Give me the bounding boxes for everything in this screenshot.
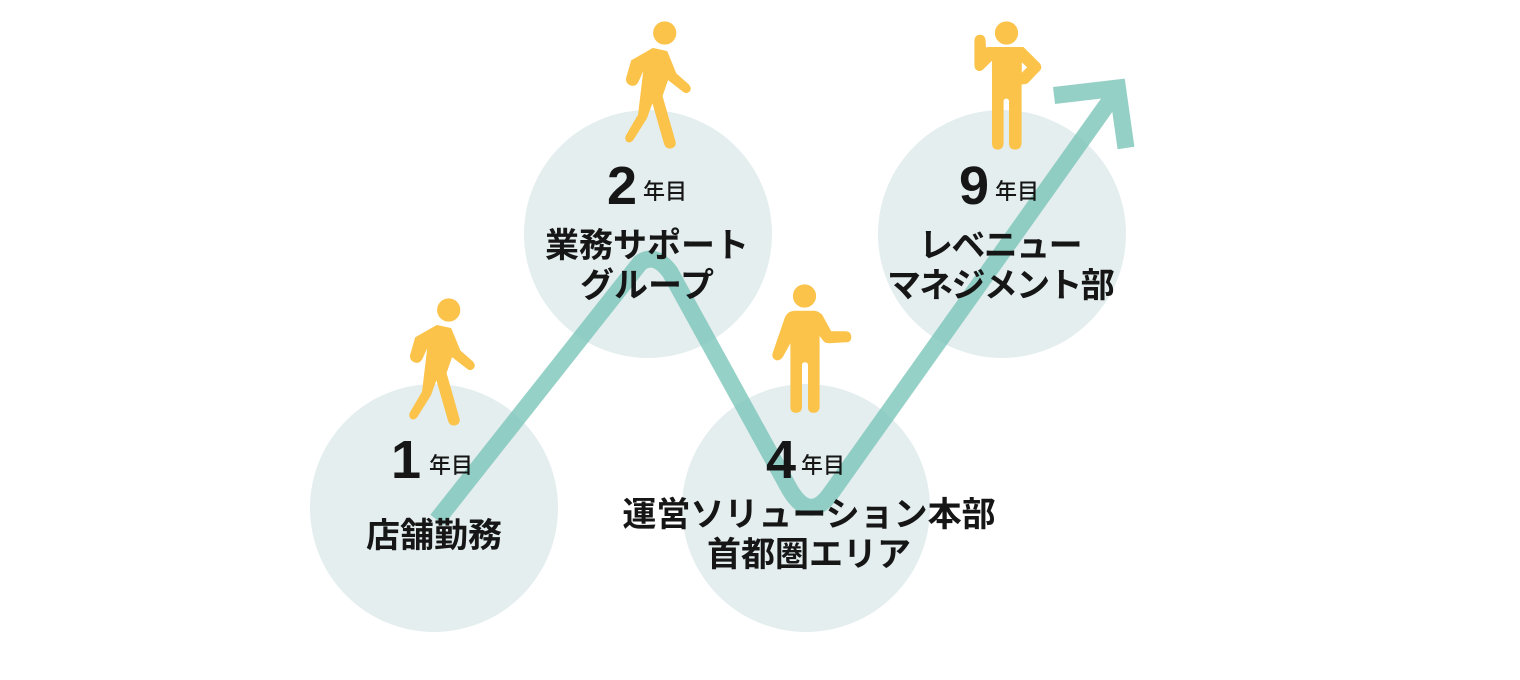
icon: walking person year 1 [410, 299, 474, 425]
label: year 1 [366, 430, 502, 555]
circle: year 2 [524, 110, 772, 358]
label: year 9: レベニュー [919, 227, 1081, 265]
label: year 4 [622, 430, 996, 574]
label: year 4: 年目 [801, 453, 845, 478]
icon: pointing person year 4 [773, 285, 851, 412]
icon: walking person year 2 [626, 22, 690, 148]
arrow: rising career path line [437, 88, 1126, 520]
label: year 2: 業務サポート [545, 227, 749, 265]
label: year 1: 店舗勤務 [366, 517, 502, 555]
label: year 4: 運営ソリューション本部 [622, 496, 996, 534]
label: year 9: マネジメント部 [887, 267, 1115, 305]
label: year 4: 4 [766, 430, 796, 490]
label: year 2: 年目 [643, 179, 687, 204]
label: year 9: 年目 [995, 179, 1039, 204]
label: year 1: 1 [391, 430, 421, 490]
label: year 1: 年目 [429, 453, 473, 478]
label: year 4: 首都圏エリア [707, 536, 911, 574]
label: year 9: 9 [959, 156, 989, 216]
circle: year 9 [878, 110, 1126, 358]
circle: year 4 [682, 384, 930, 632]
icon: hand-raised person year 9 [975, 22, 1041, 149]
label: year 2: グループ [580, 267, 714, 305]
label: year 2 [545, 156, 749, 305]
circle: year 1 [310, 384, 558, 632]
label: year 2: 2 [607, 156, 637, 216]
label: year 9 [887, 156, 1115, 305]
